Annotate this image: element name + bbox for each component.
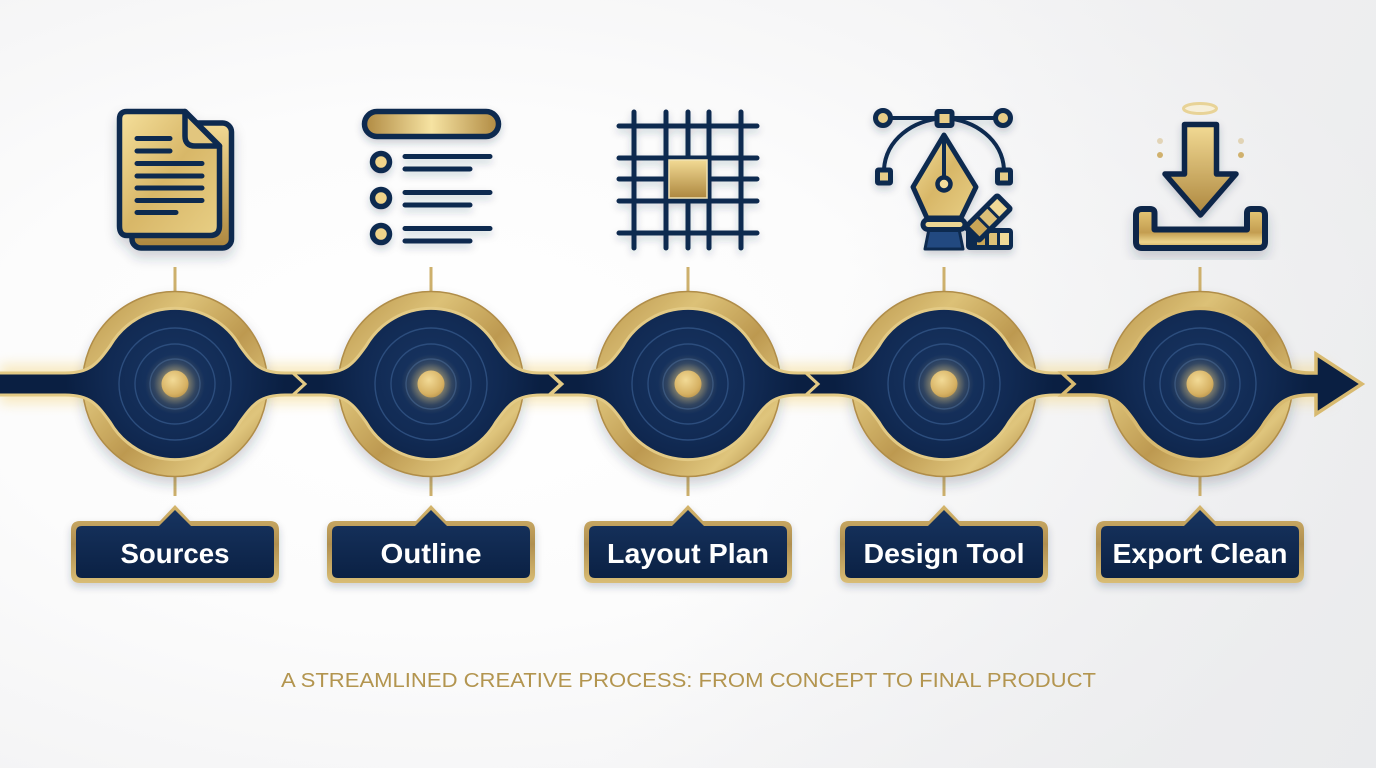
label text: Sources — [120, 538, 230, 569]
bezier handles — [876, 110, 1010, 183]
label text: Layout Plan — [607, 538, 769, 569]
concentric rings — [632, 328, 744, 440]
node 1: sources — [0, 267, 305, 496]
label fill — [332, 510, 530, 578]
icon: pen tool — [876, 110, 1014, 250]
label: outline — [327, 505, 535, 583]
halo — [1184, 104, 1216, 114]
label frame — [840, 505, 1048, 583]
highlighted cell — [669, 160, 707, 198]
label fill — [845, 510, 1043, 578]
centre dot — [930, 370, 958, 398]
gold ring — [1108, 292, 1292, 476]
back page — [132, 123, 232, 248]
label: layout plan — [584, 505, 792, 583]
grid lines — [619, 112, 757, 248]
front page — [120, 112, 220, 236]
label frame — [327, 505, 535, 583]
title pill — [364, 112, 498, 136]
concentric rings — [119, 328, 231, 440]
stems — [1198, 267, 1202, 496]
stems — [174, 267, 176, 496]
node 3: layout plan — [550, 267, 818, 496]
node 5: export clean with end arrow — [1062, 267, 1362, 496]
gold ring — [82, 292, 268, 476]
tray — [1136, 209, 1265, 248]
label frame — [1096, 505, 1304, 583]
swatches — [962, 192, 1014, 250]
icon: export download — [1136, 104, 1265, 248]
centre glow — [145, 354, 205, 414]
concentric rings — [1144, 328, 1256, 440]
label: sources — [71, 505, 279, 583]
gold ring — [596, 292, 780, 476]
navy flow body — [0, 308, 305, 460]
stems — [942, 267, 946, 496]
stems — [430, 267, 432, 496]
centre dot — [1186, 370, 1214, 398]
centre glow — [658, 354, 718, 414]
sparkle dots — [1157, 138, 1244, 158]
centre glow — [914, 354, 974, 414]
pen collar — [923, 220, 965, 230]
nib slit — [942, 136, 946, 177]
page fold — [185, 112, 220, 146]
arrow — [1165, 124, 1236, 215]
label text: Outline — [381, 538, 481, 569]
stems — [686, 267, 690, 496]
pen nib — [913, 135, 976, 218]
node 4: design tool — [806, 267, 1074, 496]
centre glow — [401, 354, 461, 414]
concentric rings — [888, 328, 1000, 440]
label text: Export Clean — [1112, 538, 1288, 569]
navy flow body — [806, 308, 1074, 460]
icon: layout grid — [619, 112, 757, 248]
navy flow body and arrowhead — [1062, 308, 1362, 460]
bezier curve — [884, 118, 1004, 169]
label frame — [584, 505, 792, 583]
centre dot — [162, 370, 188, 398]
navy flow body — [550, 308, 818, 460]
bullets — [372, 154, 390, 242]
centre dot — [418, 370, 444, 398]
centre dot — [674, 370, 702, 398]
caption: A STREAMLINED CREATIVE PROCESS: FROM CONCEPT TO FINAL PRODUCT — [281, 670, 1096, 692]
pen base — [925, 229, 963, 249]
centre glow — [1170, 354, 1230, 414]
label fill — [589, 510, 787, 578]
gold ring — [338, 292, 524, 476]
label: export clean — [1096, 505, 1304, 583]
label frame — [71, 505, 279, 583]
label fill — [76, 510, 274, 578]
label text: Design Tool — [863, 538, 1025, 569]
navy flow body — [293, 308, 561, 460]
label: design tool — [840, 505, 1048, 583]
node 2: outline — [293, 267, 561, 496]
concentric rings — [375, 328, 487, 440]
nib hole — [938, 178, 950, 190]
label fill — [1101, 510, 1299, 578]
icon: sources document — [120, 112, 232, 248]
text lines — [137, 138, 202, 212]
icon: outline list — [364, 112, 498, 242]
flow line glow — [0, 364, 1330, 404]
outline lines — [405, 156, 490, 241]
gold ring — [852, 292, 1036, 476]
